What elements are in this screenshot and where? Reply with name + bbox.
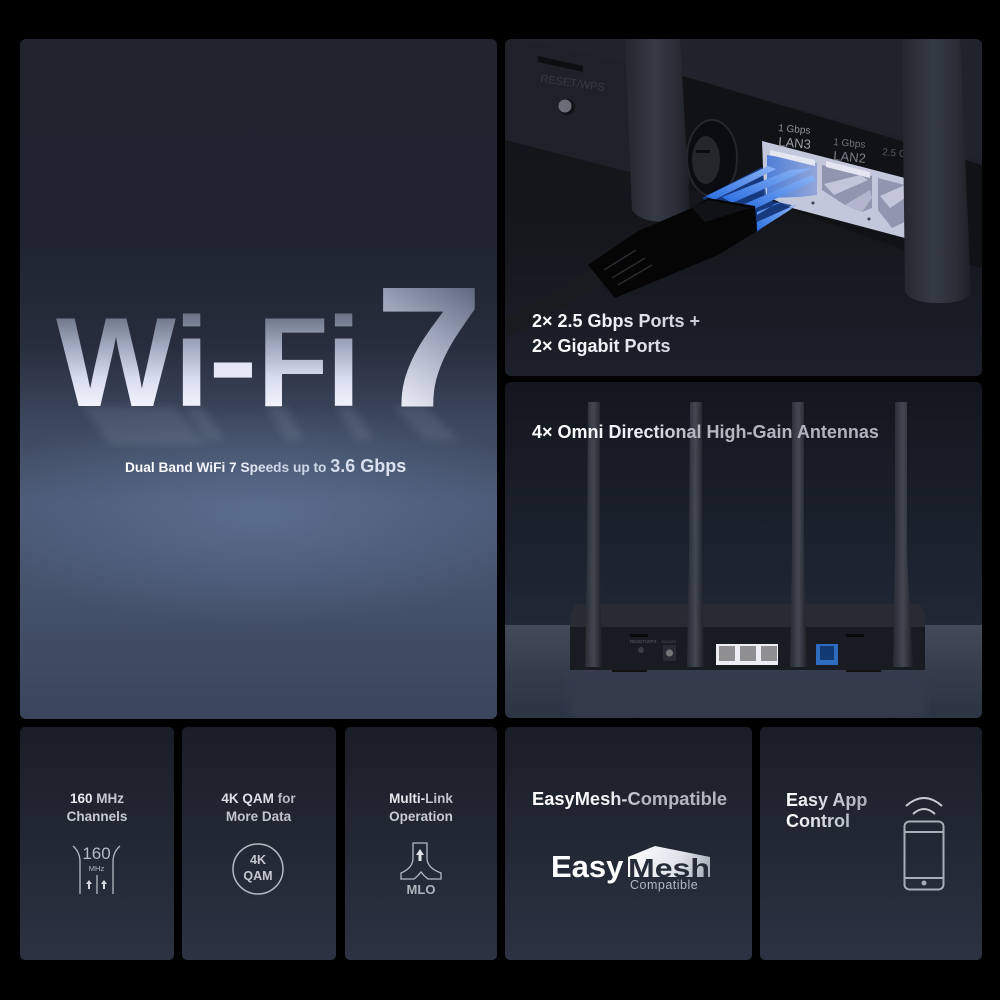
card: 4K QAM: More Data bbox=[226, 809, 292, 824]
port 2 bbox=[822, 165, 872, 212]
panel: ports close-up bbox=[505, 39, 982, 376]
logo: EasyMesh: Compatible bbox=[630, 878, 698, 892]
reset button: RESET/WPS bbox=[540, 73, 605, 94]
port 1 bbox=[767, 155, 817, 198]
heading: Wi-Fi 7: W bbox=[56, 291, 176, 433]
card: 160 MHz: 160 MHz bbox=[70, 791, 124, 806]
heading: Wi-Fi 7: i bbox=[174, 291, 209, 433]
card: Easy App Control bbox=[760, 727, 982, 960]
subtitle: Dual Band WiFi 7 Speeds up to 3.6 Gbps bbox=[125, 456, 406, 476]
heading: Wi-Fi 7: i bbox=[326, 291, 361, 433]
card: EasyMesh: EasyMesh-Compatible bbox=[532, 788, 727, 809]
card: Multi-Link Operation: Multi-Link bbox=[389, 791, 453, 806]
reset button bbox=[538, 56, 605, 115]
icon: 4K QAM circle bbox=[233, 844, 283, 894]
logo: EasyMesh: Easy bbox=[551, 849, 624, 884]
LAN port block: 2.5 G bbox=[882, 147, 907, 160]
text: antennas: 4× Omni Directional High-Gain Antennas bbox=[532, 422, 879, 442]
logo: EasyMesh bbox=[551, 846, 710, 892]
heading: Wi-Fi 7: 7 bbox=[378, 255, 480, 439]
router body: DC/12V bbox=[662, 639, 676, 644]
text: ports: 2× Gigabit Ports bbox=[532, 336, 671, 356]
icon: MLO: MLO bbox=[407, 882, 435, 897]
LAN port block bbox=[762, 123, 907, 238]
antenna right bbox=[902, 39, 971, 303]
reset and power bbox=[630, 634, 648, 637]
icon: phone with wifi bbox=[904, 798, 944, 890]
router back wall bbox=[505, 39, 982, 185]
icon: 160 MHz channels bbox=[73, 844, 120, 894]
router body: RESET/WPS bbox=[630, 639, 657, 644]
floor bbox=[505, 625, 982, 718]
card: Easy App Control: Control bbox=[786, 811, 850, 831]
LAN port block: LAN3 bbox=[778, 134, 811, 152]
panel: antennas bbox=[505, 382, 982, 718]
card: 4K QAM bbox=[182, 727, 336, 960]
LAN port block: LAN2 bbox=[833, 148, 866, 166]
WAN port bbox=[816, 644, 838, 665]
icon: MLO bbox=[401, 843, 441, 897]
LAN port block: 1 Gbps bbox=[778, 123, 811, 137]
four antennas bbox=[585, 402, 913, 667]
heading: Wi-Fi 7: - bbox=[208, 288, 258, 430]
card: 160 MHz: Channels bbox=[67, 809, 127, 824]
icon: 4K QAM circle: QAM bbox=[243, 869, 273, 883]
panel: Wi-Fi 7 hero bbox=[20, 39, 497, 719]
ethernet plug and cable bbox=[505, 198, 757, 330]
card: EasyMesh bbox=[505, 727, 752, 960]
icon: 160 MHz channels: 160 bbox=[82, 844, 111, 863]
LAN ports bbox=[716, 644, 778, 665]
LAN port block: 1 Gbps bbox=[833, 137, 866, 151]
logo: EasyMesh: Mesh bbox=[628, 853, 710, 883]
antenna left bbox=[625, 39, 690, 222]
text: ports: 2× 2.5 Gbps Ports + bbox=[532, 311, 700, 331]
icon: 160 MHz channels: MHz bbox=[89, 864, 104, 873]
reflections under Wi-Fi letters bbox=[82, 406, 460, 445]
card: Easy App Control: Easy App bbox=[786, 790, 867, 810]
card: 4K QAM: 4K QAM for bbox=[221, 791, 296, 806]
antenna connector bbox=[687, 120, 737, 196]
router body bbox=[570, 604, 925, 672]
port 3 bbox=[878, 178, 905, 228]
card: 160 MHz bbox=[20, 727, 174, 960]
card: Multi-Link Operation: Operation bbox=[389, 809, 453, 824]
blue data beams bbox=[702, 166, 816, 232]
heading: Wi-Fi 7: F bbox=[258, 291, 328, 433]
card: Multi-Link Operation bbox=[345, 727, 497, 960]
icon: 4K QAM circle: 4K bbox=[250, 853, 266, 867]
heading: Wi-Fi 7 bbox=[56, 288, 475, 406]
